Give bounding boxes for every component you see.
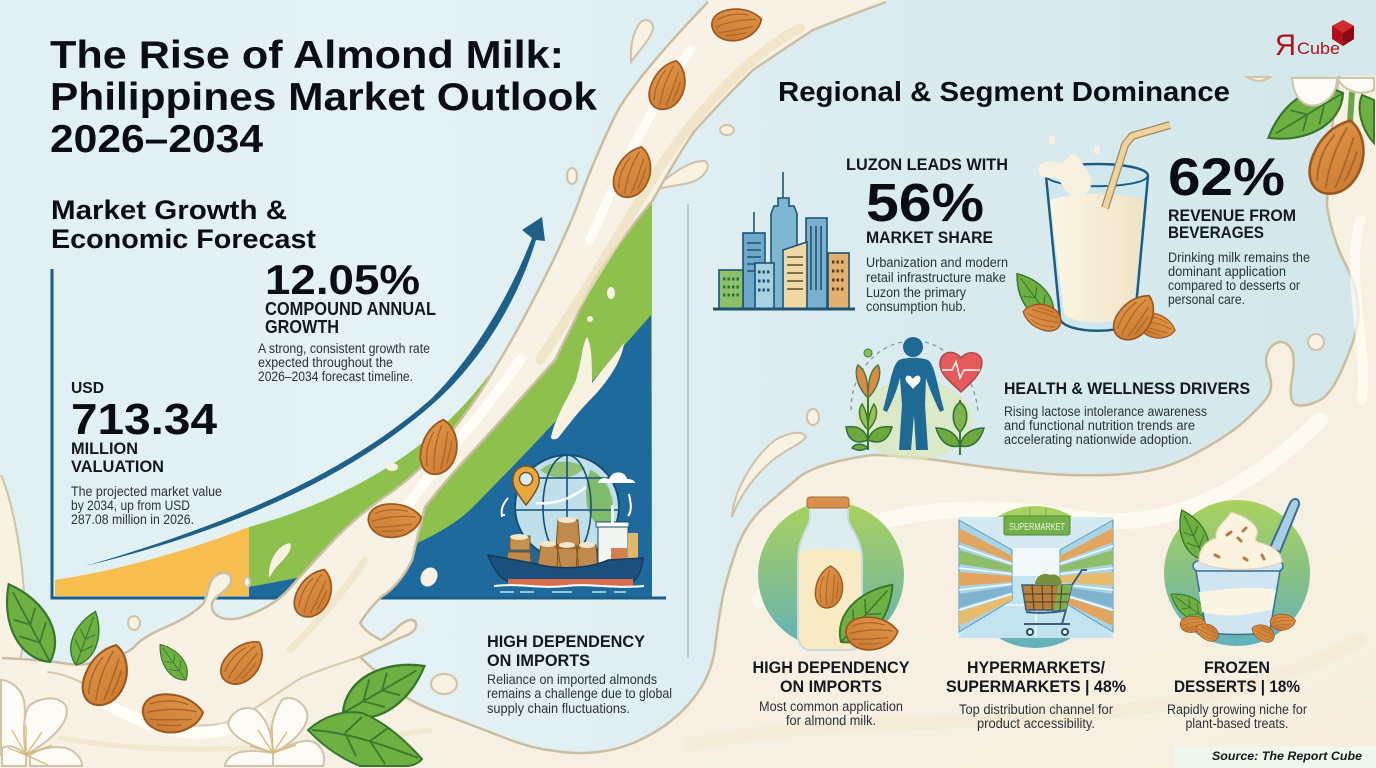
stat: Luzon market share: Urbanization and modern bbox=[866, 255, 1008, 270]
heading: market growth: Market Growth & bbox=[51, 195, 287, 225]
logo bbox=[1270, 0, 1376, 76]
stat: Luzon market share: Luzon the primary bbox=[866, 285, 966, 300]
icon: supermarket aisle: SUPERMARKET bbox=[1009, 522, 1065, 533]
stat: beverages revenue: dominant application bbox=[1168, 264, 1286, 279]
stat: valuation: 713.34 bbox=[71, 395, 218, 444]
stat: CAGR bbox=[258, 256, 436, 384]
caption: high dependency on imports (bottom): Most common application bbox=[759, 699, 903, 714]
caption: hypermarkets and supermarkets bbox=[946, 658, 1126, 731]
stat: Luzon market share: LUZON LEADS WITH bbox=[846, 156, 1008, 174]
stat: Luzon market share: 56% bbox=[866, 173, 984, 233]
stat: beverages revenue: REVENUE FROM bbox=[1168, 206, 1296, 225]
stat: Luzon market share: MARKET SHARE bbox=[866, 228, 993, 247]
stat: valuation: VALUATION bbox=[71, 457, 164, 476]
caption: hypermarkets and supermarkets: SUPERMARKETS | 48% bbox=[946, 677, 1126, 696]
stat: beverages revenue bbox=[1168, 148, 1310, 307]
title: The Rise of Almond Milk: bbox=[50, 34, 564, 77]
chart band: yellow early years bbox=[55, 527, 249, 596]
icon: almond milk bottle bbox=[758, 497, 905, 653]
text: high dependency on imports (left): remains a challenge due to global bbox=[487, 685, 672, 701]
icon: supermarket aisle bbox=[959, 506, 1113, 648]
caption: frozen desserts: Rapidly growing niche for bbox=[1167, 702, 1307, 717]
flower: bottom left corner bbox=[1, 680, 82, 766]
stat: CAGR: GROWTH bbox=[265, 317, 339, 337]
icon: health and wellness figure bbox=[846, 337, 984, 460]
text: high dependency on imports (left): supply chain fluctuations. bbox=[487, 700, 630, 716]
text: high dependency on imports (left): HIGH DEPENDENCY bbox=[487, 632, 646, 651]
caption: hypermarkets and supermarkets: product accessibility. bbox=[977, 716, 1095, 731]
icon: cargo ship and globe bbox=[488, 455, 644, 592]
title: 2026–2034 bbox=[50, 118, 263, 161]
vertical divider bbox=[687, 204, 689, 658]
icon: glass of almond milk bbox=[1007, 125, 1177, 347]
stat: CAGR: A strong, consistent growth rate bbox=[258, 341, 430, 356]
growth arrow bbox=[85, 217, 545, 566]
caption: high dependency on imports (bottom): for almond milk. bbox=[786, 713, 876, 728]
text: high dependency on imports (left) bbox=[487, 632, 672, 716]
heading: regional dominance: Regional & Segment Dominance bbox=[778, 76, 1230, 107]
stat: Luzon market share bbox=[846, 156, 1008, 314]
chart axes bbox=[52, 269, 666, 598]
icon: city skyline bbox=[713, 172, 855, 309]
text: high dependency on imports (left): ON IMPORTS bbox=[487, 651, 590, 670]
stat: valuation bbox=[71, 380, 222, 527]
title: Philippines Market Outlook bbox=[50, 76, 597, 119]
stat: beverages revenue: compared to desserts or bbox=[1168, 278, 1300, 293]
caption: frozen desserts bbox=[1167, 658, 1307, 731]
stat: CAGR: expected throughout the bbox=[258, 355, 393, 370]
almonds in milk stream bbox=[141, 2, 765, 735]
stat: beverages revenue: 62% bbox=[1168, 148, 1285, 207]
caption: frozen desserts: DESSERTS | 18% bbox=[1174, 677, 1300, 696]
source note bbox=[1174, 747, 1376, 768]
caption: hypermarkets and supermarkets: Top distribution channel for bbox=[959, 702, 1113, 717]
stat: valuation: MILLION bbox=[71, 439, 138, 458]
text: health and wellness drivers: Rising lactose intolerance awareness bbox=[1004, 404, 1207, 419]
caption: hypermarkets and supermarkets: HYPERMARKETS/ bbox=[967, 658, 1105, 677]
heading: market growth bbox=[51, 195, 316, 254]
stat: valuation: by 2034, up from USD bbox=[71, 498, 190, 513]
stat: CAGR: COMPOUND ANNUAL bbox=[265, 299, 436, 319]
stat: valuation: The projected market value bbox=[71, 484, 222, 499]
chart band: green mid years bbox=[249, 203, 652, 597]
text: health and wellness drivers: HEALTH & WELLNESS DRIVERS bbox=[1004, 379, 1250, 398]
stat: Luzon market share: retail infrastructure make bbox=[866, 270, 1006, 285]
caption: frozen desserts: plant-based treats. bbox=[1186, 716, 1288, 731]
caption: high dependency on imports (bottom): HIGH DEPENDENCY bbox=[752, 658, 910, 677]
icon: frozen dessert cup bbox=[1164, 499, 1310, 646]
milk drops behind stream bbox=[128, 20, 1324, 694]
growth chart bbox=[52, 203, 666, 598]
stat: beverages revenue: BEVERAGES bbox=[1168, 223, 1264, 242]
heading: market growth: Economic Forecast bbox=[51, 224, 316, 254]
text: health and wellness drivers: and functional nutrition trends are bbox=[1004, 418, 1195, 433]
title bbox=[50, 34, 597, 161]
text: health and wellness drivers bbox=[1004, 379, 1250, 447]
chart band: blue late years bbox=[249, 315, 652, 597]
text: health and wellness drivers: accelerating nationwide adoption. bbox=[1004, 432, 1192, 447]
stat: beverages revenue: Drinking milk remains the bbox=[1168, 250, 1310, 265]
flower: bottom centre bbox=[225, 698, 324, 766]
milk tendril on left edge bbox=[0, 473, 25, 662]
decorative leaves and flowers bottom left bbox=[0, 575, 435, 766]
tendril in chart blue bbox=[551, 337, 624, 439]
stat: CAGR: 12.05% bbox=[265, 256, 420, 303]
caption: frozen desserts: FROZEN bbox=[1204, 658, 1270, 677]
stat: Luzon market share: consumption hub. bbox=[866, 299, 966, 314]
decorative almond branch top right bbox=[1259, 77, 1374, 201]
tear drop upper left bbox=[631, 20, 653, 62]
logo: Я bbox=[1275, 29, 1296, 62]
text: high dependency on imports (left): Reliance on imported almonds bbox=[487, 671, 657, 687]
stat: valuation: USD bbox=[71, 380, 104, 397]
source note: Source: The Report Cube bbox=[1212, 749, 1362, 763]
stat: beverages revenue: personal care. bbox=[1168, 292, 1245, 307]
caption: high dependency on imports (bottom) bbox=[752, 658, 910, 728]
logo: Cube bbox=[1297, 39, 1340, 58]
stat: CAGR: 2026–2034 forecast timeline. bbox=[258, 369, 413, 384]
caption: high dependency on imports (bottom): ON IMPORTS bbox=[780, 677, 882, 696]
stat: valuation: 287.08 million in 2026. bbox=[71, 512, 194, 527]
